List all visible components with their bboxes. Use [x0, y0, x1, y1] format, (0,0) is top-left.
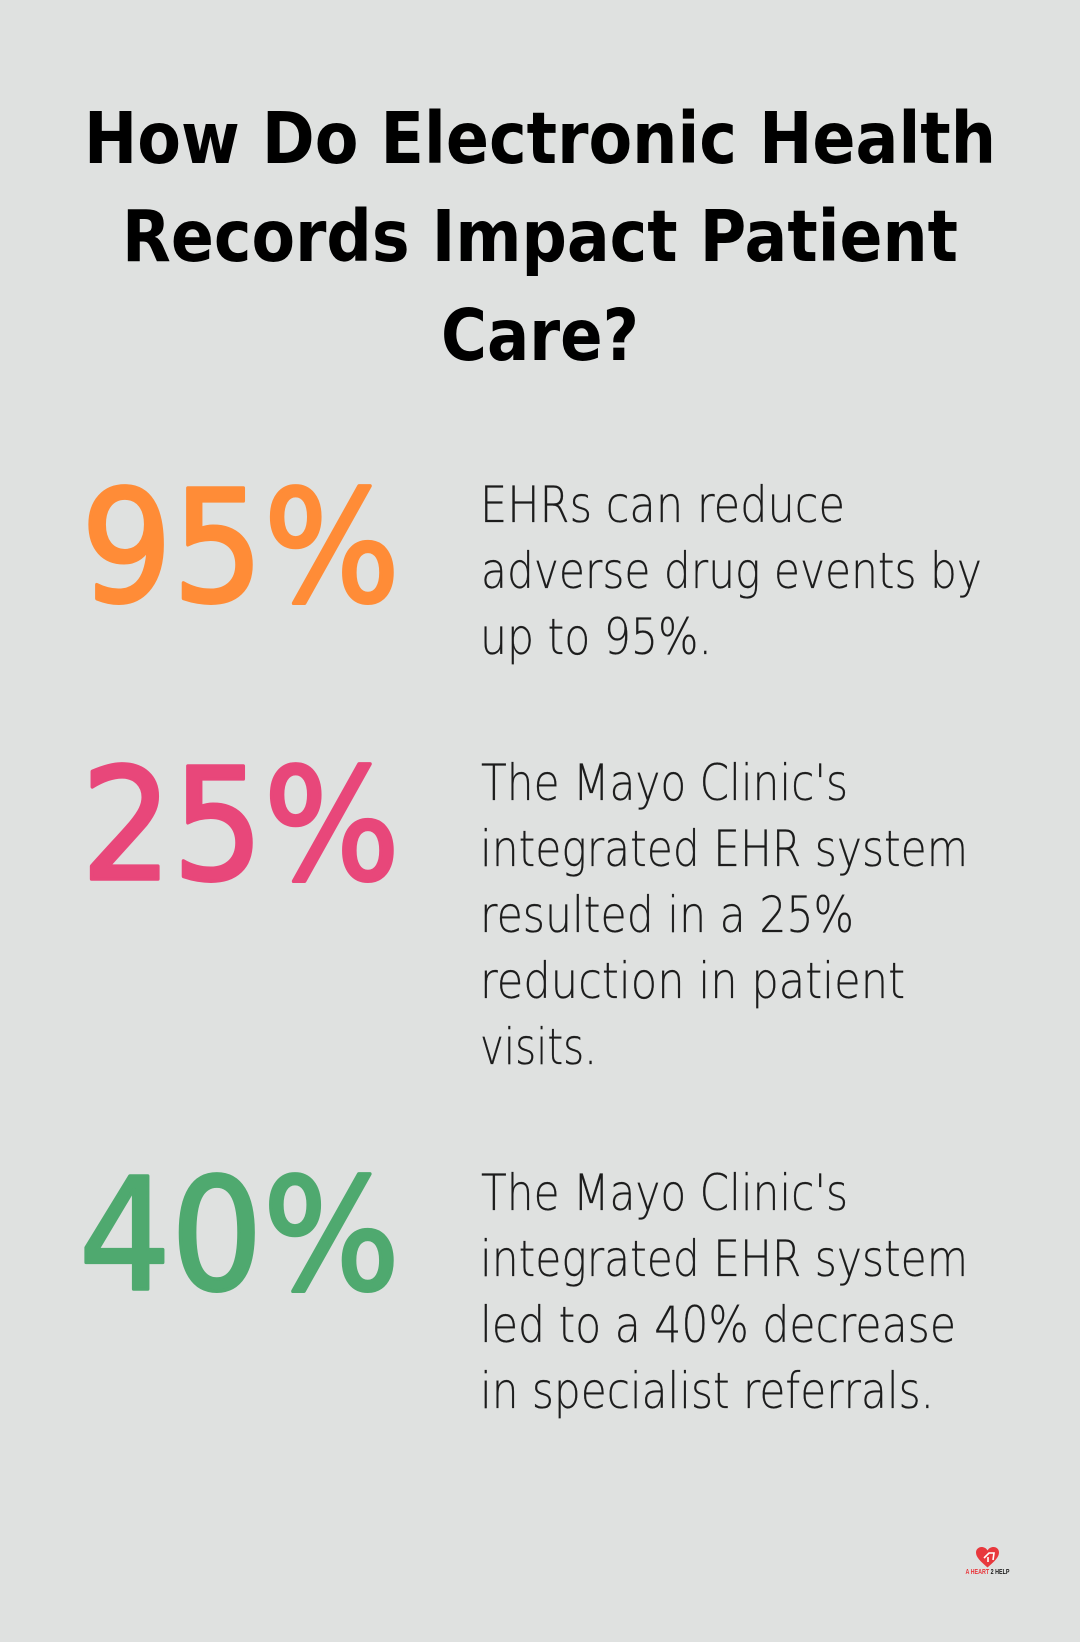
- title: Care?: [441, 294, 639, 377]
- icon: heart: [976, 1547, 999, 1568]
- title: [84, 97, 996, 377]
- stat: 25%: [81, 735, 968, 1076]
- description: specialist referrals: led to a 40% decrease: [480, 1296, 956, 1354]
- title: Records Impact Patient: [122, 195, 958, 278]
- description: patient visits: The Mayo Clinic's: [481, 754, 848, 812]
- big number: 25%: 25%: [81, 735, 400, 916]
- big number: 40%: 40%: [79, 1145, 400, 1326]
- description: adverse drug events: up to 95%.: [480, 608, 712, 666]
- stat: 95%: [81, 457, 982, 666]
- description: patient visits: integrated EHR system: [480, 820, 968, 878]
- description: adverse drug events: adverse drug events by: [481, 542, 982, 600]
- description: patient visits: resulted in a 25%: [480, 886, 854, 944]
- description: specialist referrals: The Mayo Clinic's: [481, 1164, 848, 1222]
- description: patient visits: [480, 754, 968, 1076]
- description: patient visits: visits.: [480, 1018, 597, 1076]
- description: adverse drug events: EHRs can reduce: [480, 476, 845, 534]
- logo: A Heart 2 Help: [966, 1547, 1010, 1576]
- description: specialist referrals: integrated EHR system: [480, 1230, 968, 1288]
- stat: 40%: [79, 1145, 968, 1420]
- title: How Do Electronic Health: [84, 97, 996, 180]
- description: specialist referrals: [480, 1164, 968, 1420]
- description: adverse drug events: [480, 476, 982, 666]
- description: patient visits: reduction in patient: [480, 952, 905, 1010]
- big number: 95%: 95%: [81, 457, 400, 638]
- description: specialist referrals: in specialist referrals.: [480, 1362, 934, 1420]
- logo wordmark: A HEART 2 HELP: [966, 1567, 1010, 1576]
